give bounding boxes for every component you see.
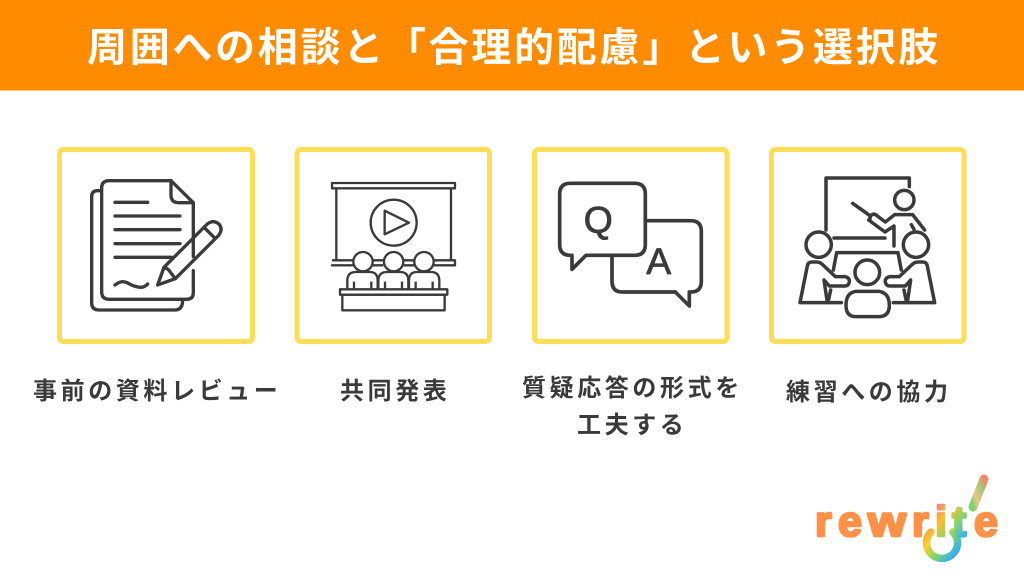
letter Q: Q	[584, 198, 613, 240]
logo wordmark	[815, 498, 998, 546]
icon: document and pencil	[92, 181, 221, 310]
title: 周囲への相談と「合理的配慮」という選択肢	[87, 26, 941, 70]
logo: rewrite	[815, 479, 998, 558]
logo wordmark: i	[935, 498, 947, 546]
logo wordmark: e	[838, 498, 862, 546]
panel: Q and A format	[534, 150, 727, 342]
header band	[0, 0, 1024, 90]
icon: presenter and meeting group	[800, 178, 935, 317]
label: Q and A format	[522, 375, 743, 439]
icon: screen with audience	[332, 183, 455, 310]
logo pencil	[973, 479, 984, 507]
label: document review: 事前の資料レビュー	[33, 378, 281, 405]
letter A: A	[646, 240, 671, 282]
logo wordmark: t	[952, 498, 966, 546]
label: Q and A format: 工夫する	[577, 412, 687, 439]
label: joint presentation: 共同発表	[340, 378, 450, 405]
logo swoosh	[926, 532, 958, 558]
logo wordmark: e	[974, 498, 998, 546]
panel: joint presentation	[297, 150, 490, 342]
panel: document review	[60, 150, 252, 342]
label: Q and A format: 質疑応答の形式を	[522, 375, 743, 402]
logo wordmark: r	[912, 498, 929, 546]
icon: question and answer bubbles	[560, 183, 701, 306]
logo wordmark: w	[867, 498, 907, 546]
panel: practice cooperation	[772, 150, 964, 342]
label: practice cooperation: 練習への協力	[786, 379, 952, 406]
logo wordmark: r	[815, 498, 832, 546]
